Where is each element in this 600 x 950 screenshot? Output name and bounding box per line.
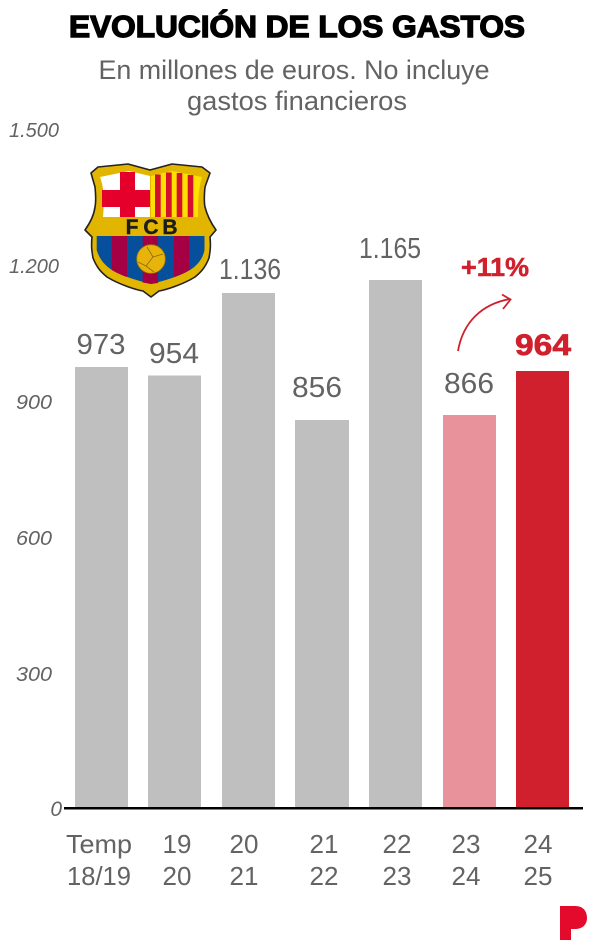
crest FCB letters: B — [162, 216, 178, 239]
y axis labels — [9, 120, 62, 821]
title: EVOLUCIÓN DE LOS GASTOS — [69, 8, 525, 44]
crest catalan stripes quarter — [151, 171, 202, 217]
icon: FC Barcelona crest — [85, 164, 216, 297]
growth label +11%: +11% — [461, 252, 529, 282]
x axis baseline — [64, 807, 583, 810]
crest outer shield — [85, 164, 216, 297]
x axis labels: 25 — [524, 861, 552, 891]
x axis labels: 20 — [163, 861, 191, 891]
bar: temporada 19/20 — [148, 376, 201, 808]
bar value labels: 973 — [76, 329, 126, 361]
bar: temporada 18/19 — [75, 367, 128, 808]
x axis labels: 21 — [230, 861, 258, 891]
crest FCB letters: C — [143, 216, 159, 239]
x axis labels: 18/19 — [67, 861, 131, 891]
crest FCB letters: F — [126, 216, 139, 239]
x axis labels: 23 — [452, 829, 480, 859]
x axis labels — [66, 829, 552, 891]
x axis labels: 24 — [452, 861, 480, 891]
x axis labels: Temp — [66, 829, 132, 859]
subtitle: En millones de euros. No incluye — [98, 55, 490, 85]
crest football — [137, 245, 165, 273]
y axis labels: 300 — [16, 664, 52, 686]
highlighted value 964: 964 — [515, 329, 571, 362]
bar value labels: 866 — [444, 368, 494, 400]
y axis labels: 0 — [50, 798, 62, 821]
x axis labels: 24 — [524, 829, 552, 859]
bar value labels — [76, 233, 494, 404]
x axis labels: 22 — [310, 861, 338, 891]
y axis labels: 900 — [16, 392, 52, 414]
crest FCB letters — [126, 216, 178, 239]
icon: publisher logo — [560, 906, 587, 940]
y axis labels: 600 — [16, 528, 52, 550]
subtitle: gastos financieros — [187, 86, 407, 116]
bar: temporada 21/22 — [295, 420, 349, 808]
bar: temporada 23/24 — [443, 415, 496, 808]
x axis labels: 22 — [383, 829, 411, 859]
bar chart — [75, 280, 569, 808]
arrow: growth — [458, 294, 510, 351]
x axis labels: 19 — [163, 829, 191, 859]
crest white and red cross quarter — [100, 171, 150, 217]
x axis labels: 20 — [230, 829, 258, 859]
y axis labels: 1.200 — [9, 256, 59, 278]
bar value labels: 856 — [292, 372, 342, 404]
bar: temporada 22/23 — [369, 280, 422, 808]
bar value labels: 954 — [149, 338, 199, 370]
x axis labels: 23 — [383, 861, 411, 891]
bar value labels: 1.136 — [219, 254, 281, 286]
bar: temporada 24/25 — [516, 371, 569, 808]
bar: temporada 20/21 — [222, 293, 275, 808]
bar value labels: 1.165 — [359, 233, 421, 265]
crest blue and claret stripes — [97, 236, 204, 284]
subtitle — [98, 55, 490, 116]
x axis labels: 21 — [310, 829, 338, 859]
y axis labels: 1.500 — [9, 120, 59, 142]
